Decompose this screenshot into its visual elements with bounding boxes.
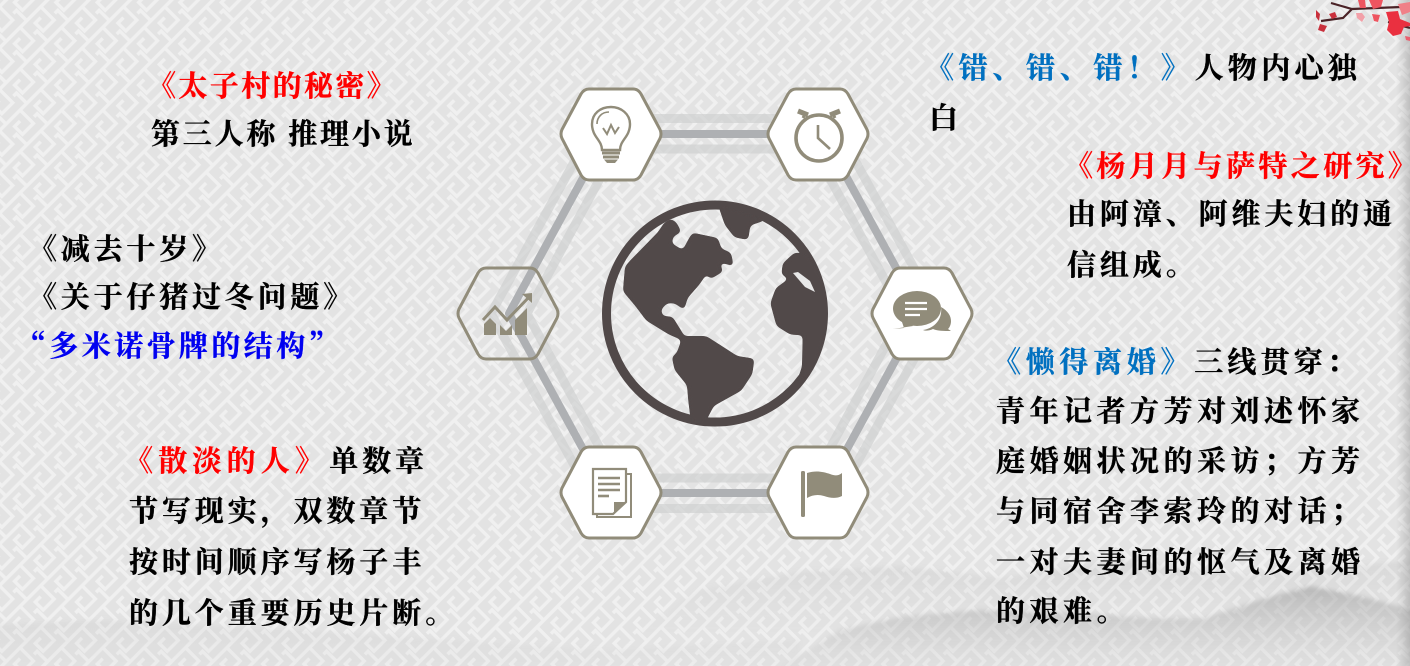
text: 懒得离婚: 庭婚姻状况的采访；方芳	[996, 439, 1365, 480]
hexagon: light bulb	[561, 89, 661, 180]
text: 减去十岁 list: “多米诺骨牌的结构”	[17, 324, 341, 365]
text: 减去十岁 list	[17, 227, 356, 365]
icon: bulb	[592, 107, 630, 157]
text: 减去十岁 list: 《减去十岁》	[28, 227, 225, 268]
hexagon: flag	[768, 447, 868, 538]
icon: stopwatch	[796, 111, 842, 161]
text: 杨月月与萨特之研究: 信组成。	[1067, 243, 1199, 284]
text: 减去十岁 list: 《关于仔猪过冬问题》	[28, 275, 356, 316]
text: 懒得离婚: 一对夫妻间的怄气及离婚	[996, 540, 1365, 581]
text: 太子村的秘密: 第三人称 推理小说	[151, 112, 415, 153]
hexagon: stopwatch	[768, 89, 868, 180]
text: 错错错	[925, 46, 1361, 137]
text: 散淡的人: 按时间顺序写杨子丰	[129, 540, 425, 581]
text: 错错错: 白	[929, 96, 958, 137]
hexagon: speech bubbles	[872, 268, 972, 359]
text: 散淡的人: 的几个重要历史片断。	[129, 591, 458, 632]
text: 错错错: 《错、错、错！》人物内心独	[925, 46, 1361, 87]
icon: chart	[484, 308, 527, 335]
text: 太子村的秘密: 《太子村的秘密》	[147, 64, 398, 105]
text: 散淡的人	[124, 439, 458, 632]
text: 懒得离婚	[992, 340, 1365, 630]
text: 散淡的人: 节写现实，双数章节	[129, 489, 425, 530]
text: 太子村的秘密	[147, 64, 415, 153]
icon: document	[593, 469, 631, 517]
text: 懒得离婚: 与同宿舍李索玲的对话；	[996, 489, 1365, 530]
text: 懒得离婚: 青年记者方芳对刘述怀家	[996, 389, 1365, 430]
text: 懒得离婚: 《懒得离婚》三线贯穿：	[992, 340, 1360, 381]
land masses	[623, 210, 819, 418]
Mediterranean gap	[793, 272, 815, 292]
hexagon: documents	[561, 447, 661, 538]
text: 杨月月与萨特之研究: 《杨月月与萨特之研究》	[1064, 144, 1410, 185]
icon: bubbles	[893, 291, 951, 331]
text: 散淡的人: 《散淡的人》单数章	[124, 439, 428, 480]
text: 杨月月与萨特之研究	[1064, 144, 1410, 284]
text: 杨月月与萨特之研究: 由阿漳、阿维夫妇的通	[1067, 192, 1396, 233]
globe ring	[606, 205, 824, 422]
text: 懒得离婚: 的艰难。	[996, 589, 1130, 630]
icon: flag	[801, 471, 842, 517]
globe	[602, 200, 828, 426]
hexagon: growth chart	[458, 268, 558, 359]
